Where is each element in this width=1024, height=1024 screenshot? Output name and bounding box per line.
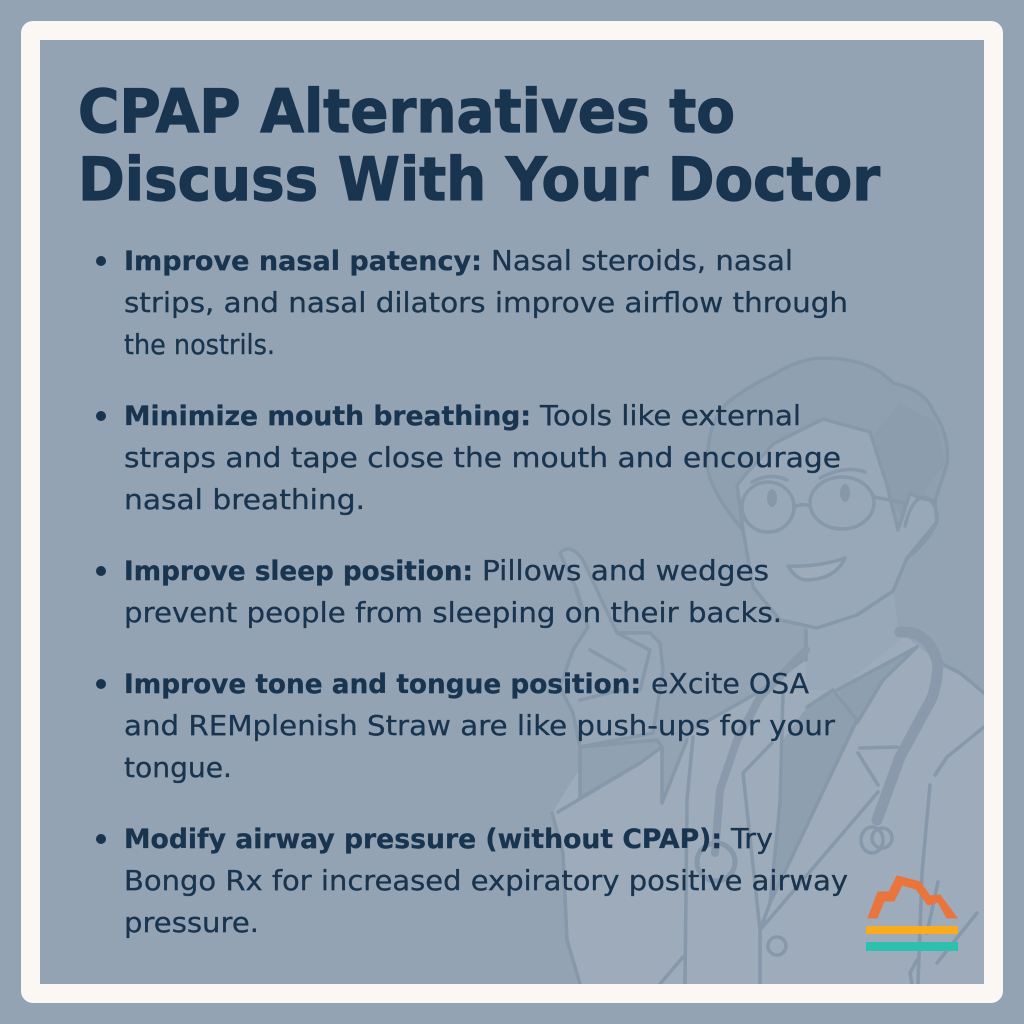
doctor coat [552, 632, 984, 984]
bullet: improve tone and tongue position: Improve tone and tongue position: [124, 669, 641, 700]
bullet: improve sleep position: Improve sleep position: [124, 556, 473, 587]
bullet: improve nasal patency: the nostrils. [124, 329, 275, 361]
bullet: minimize mouth breathing: Tools like external [539, 400, 801, 432]
doctor shirt [770, 690, 857, 903]
doctor ear [905, 497, 937, 558]
doctor face [737, 419, 937, 628]
bullet: improve tone and tongue position [96, 668, 836, 784]
bullet: modify airway pressure: Modify airway pressure (without CPAP): [124, 824, 722, 855]
bullet: minimize mouth breathing: straps and tape close the mouth and encourage [124, 442, 841, 474]
bullet: modify airway pressure: Try [730, 823, 773, 855]
bullet: modify airway pressure: pressure. [124, 907, 259, 939]
title: Discuss With Your Doctor [78, 145, 880, 215]
illustration: doctor [552, 358, 984, 984]
doctor hand [560, 549, 663, 747]
bullet: improve nasal patency: Nasal steroids, nasal [491, 245, 793, 277]
doctor glasses [742, 477, 905, 532]
bullet: improve tone and tongue position: tongue. [124, 752, 232, 784]
doctor stethoscope [697, 632, 938, 955]
title: CPAP Alternatives to [78, 77, 735, 147]
doctor hair [707, 358, 947, 530]
bullet: improve tone and tongue position: eXcite OSA [651, 668, 809, 700]
doctor sleeve cuff [580, 740, 662, 798]
bullet: improve nasal patency: Improve nasal patency: [124, 246, 482, 277]
bullet: minimize mouth breathing [96, 400, 841, 516]
bullet: improve sleep position [96, 555, 782, 629]
bullet: improve nasal patency: strips, and nasal dilators improve airflow through [124, 287, 848, 319]
bullet: improve sleep position: Pillows and wedges [482, 555, 769, 587]
bullet: improve sleep position: prevent people from sleeping on their backs. [124, 597, 782, 629]
icon: logo [866, 876, 958, 951]
doctor neck [806, 590, 900, 690]
bullet: modify airway pressure: Bongo Rx for increased expiratory positive airway [124, 865, 848, 897]
bullet: improve nasal patency [96, 245, 848, 361]
bullet: improve tone and tongue position: and REMplenish Straw are like push-ups for your [124, 710, 836, 742]
doctor mouth [788, 558, 845, 580]
bullet: minimize mouth breathing: Minimize mouth breathing: [124, 401, 531, 432]
bullet: modify airway pressure [96, 823, 848, 939]
doctor coat lines [552, 590, 984, 984]
doctor eyes and brows [752, 470, 865, 507]
title [78, 77, 880, 215]
doctor hair shadow [873, 403, 945, 522]
bullet: minimize mouth breathing: nasal breathing. [124, 484, 365, 516]
